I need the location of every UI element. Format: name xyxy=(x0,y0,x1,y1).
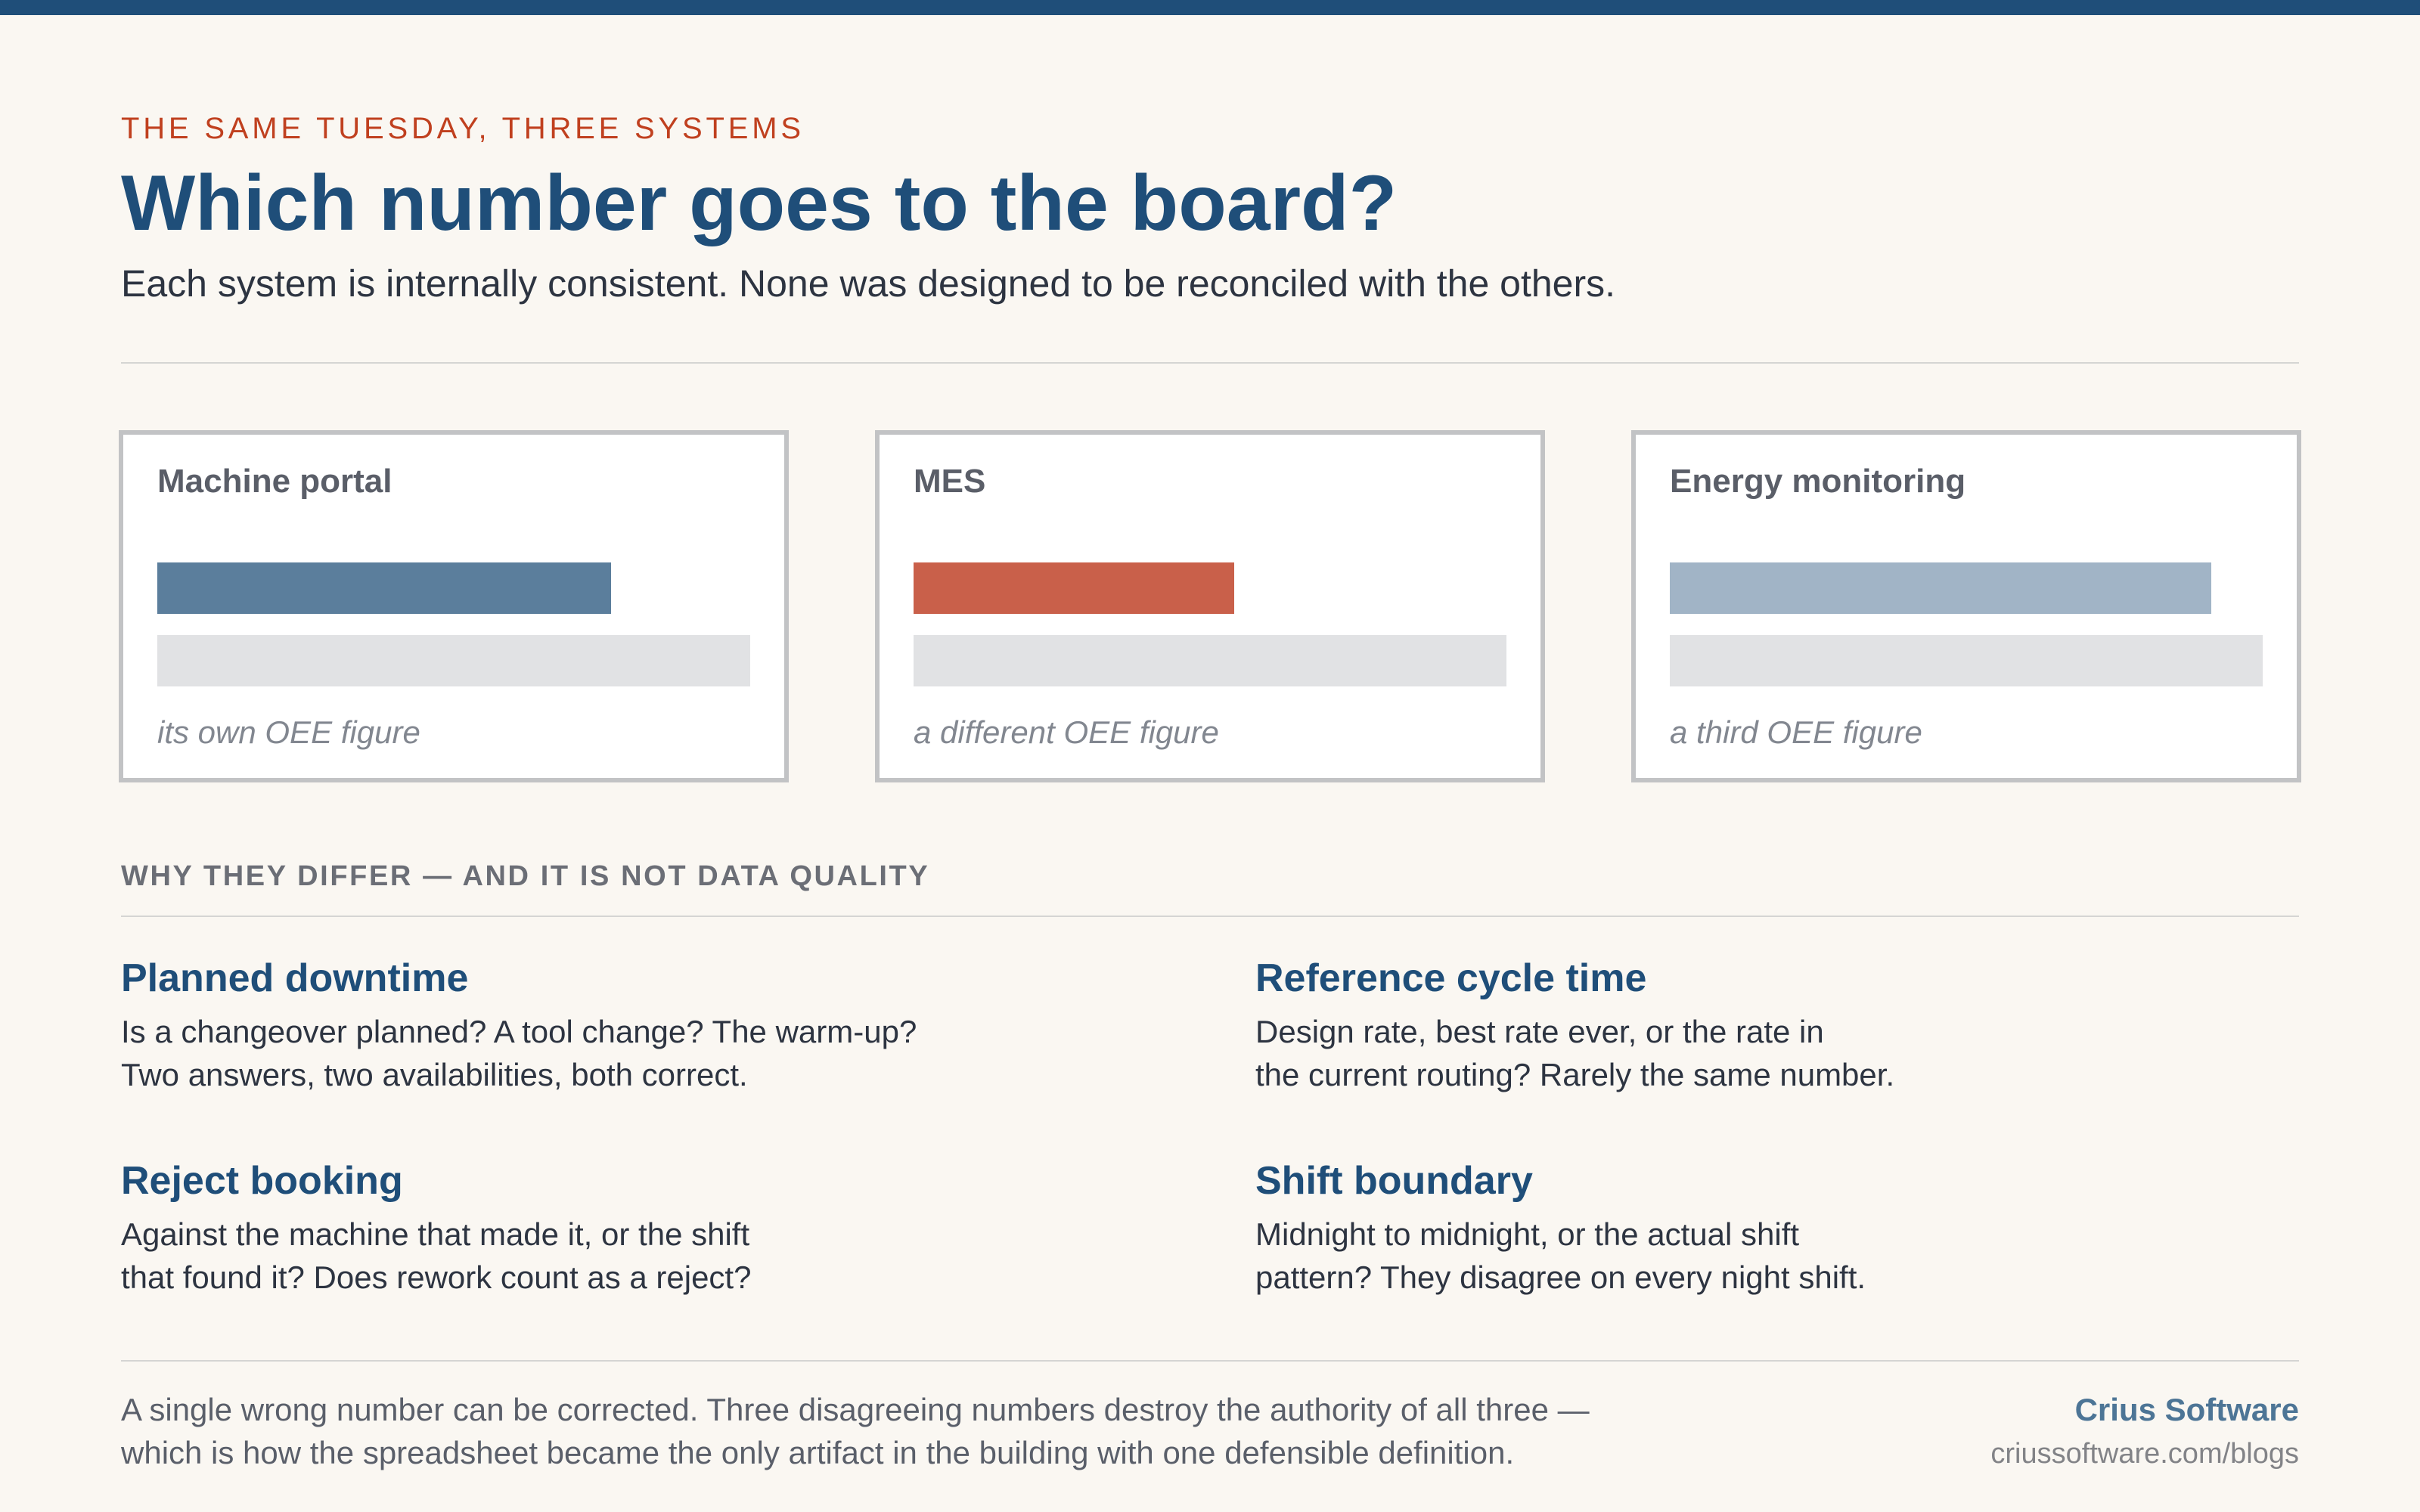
card title: Machine portal xyxy=(157,463,392,500)
reason: reference cycle time: the current routing? Rarely the same number. xyxy=(1255,1057,1894,1092)
reason: reference cycle time xyxy=(1255,956,1894,1092)
brand name: Crius Software xyxy=(2075,1392,2299,1427)
reason body: Design rate, best rate ever, or the rate in xyxy=(1255,1014,1824,1049)
reason: shift boundary xyxy=(1255,1159,1866,1295)
bar: machine portal figure xyxy=(157,562,611,614)
bar: MES figure xyxy=(914,562,1234,614)
panel: machine portal xyxy=(119,430,789,782)
top accent bar xyxy=(0,0,2420,15)
subtitle: Each system is internally consistent. None was designed to be reconciled with the others. xyxy=(121,262,1615,305)
reason heading: Reject booking xyxy=(121,1159,403,1203)
reason: planned downtime: Two answers, two availabilities, both correct. xyxy=(121,1057,748,1092)
bar: reference track xyxy=(1670,635,2263,686)
eyebrow: THE SAME TUESDAY, THREE SYSTEMS xyxy=(121,112,805,145)
reason heading: Shift boundary xyxy=(1255,1159,1533,1203)
closing statement: which is how the spreadsheet became the only artifact in the building with one defensible definition. xyxy=(121,1435,1514,1470)
brand url: criussoftware.com/blogs xyxy=(1990,1438,2299,1470)
bar: energy figure xyxy=(1670,562,2211,614)
panel: MES xyxy=(875,430,1545,782)
card title: MES xyxy=(914,463,985,500)
closing statement: A single wrong number can be corrected. Three disagreeing numbers destroy the authority of all three — xyxy=(121,1392,1590,1427)
caption: a different OEE figure xyxy=(914,714,1219,750)
reason: reject booking: that found it? Does rework count as a reject? xyxy=(121,1259,751,1295)
section heading: WHY THEY DIFFER — AND IT IS NOT DATA QUALITY xyxy=(121,860,929,892)
reason: reject booking xyxy=(121,1159,751,1295)
reason body: Is a changeover planned? A tool change? The warm-up? xyxy=(121,1014,917,1049)
caption: a third OEE figure xyxy=(1670,714,1922,750)
reason: shift boundary: pattern? They disagree on every night shift. xyxy=(1255,1259,1866,1295)
card title: Energy monitoring xyxy=(1670,463,1965,500)
title: Which number goes to the board? xyxy=(121,160,1397,247)
caption: its own OEE figure xyxy=(157,714,420,750)
closing statement xyxy=(121,1392,1590,1470)
reason body: Midnight to midnight, or the actual shift xyxy=(1255,1216,1799,1252)
brand credit xyxy=(1990,1392,2299,1470)
panel: energy monitoring xyxy=(1631,430,2301,782)
reason body: Against the machine that made it, or the shift xyxy=(121,1216,749,1252)
reason heading: Planned downtime xyxy=(121,956,468,1000)
reason: planned downtime xyxy=(121,956,917,1092)
bar: reference track xyxy=(157,635,750,686)
reason heading: Reference cycle time xyxy=(1255,956,1646,1000)
bar: reference track xyxy=(914,635,1506,686)
